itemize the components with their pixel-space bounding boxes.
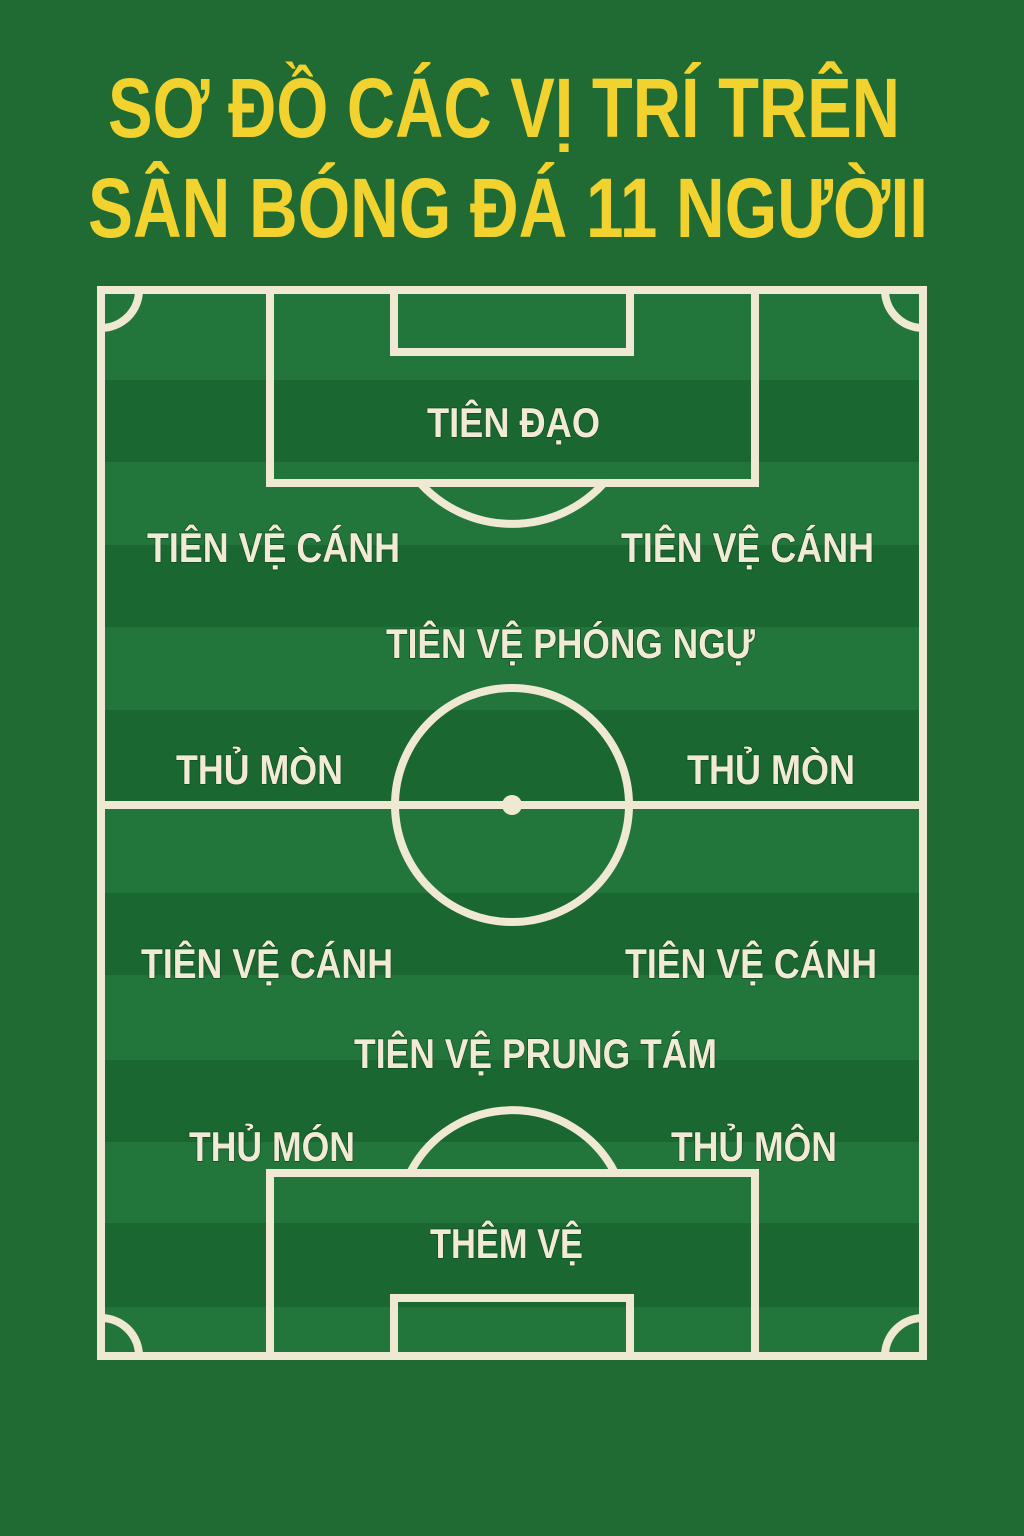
label: right keeper bottom: THỦ MÔN <box>671 1122 837 1170</box>
title <box>88 61 928 255</box>
label: left winger top: TIÊN VỆ CÁNH <box>147 523 400 571</box>
label: defender: THÊM VỆ <box>430 1219 583 1267</box>
label: right keeper top: THỦ MÒN <box>687 745 855 793</box>
label: left keeper top: THỦ MÒN <box>176 745 343 793</box>
label: left keeper bottom: THỦ MÓN <box>189 1122 355 1170</box>
label: right winger top: TIÊN VỆ CÁNH <box>621 523 874 571</box>
label: right winger bottom: TIÊN VỆ CÁNH <box>625 939 877 987</box>
label: left winger bottom: TIÊN VỆ CÁNH <box>141 939 393 987</box>
label: forward: TIÊN ĐẠO <box>427 398 600 446</box>
label: defensive midfielder: TIÊN VỆ PHÓNG NGỰ <box>386 619 755 667</box>
football pitch <box>97 286 927 1360</box>
label: central midfielder: TIÊN VỆ PRUNG TÁM <box>354 1029 717 1077</box>
